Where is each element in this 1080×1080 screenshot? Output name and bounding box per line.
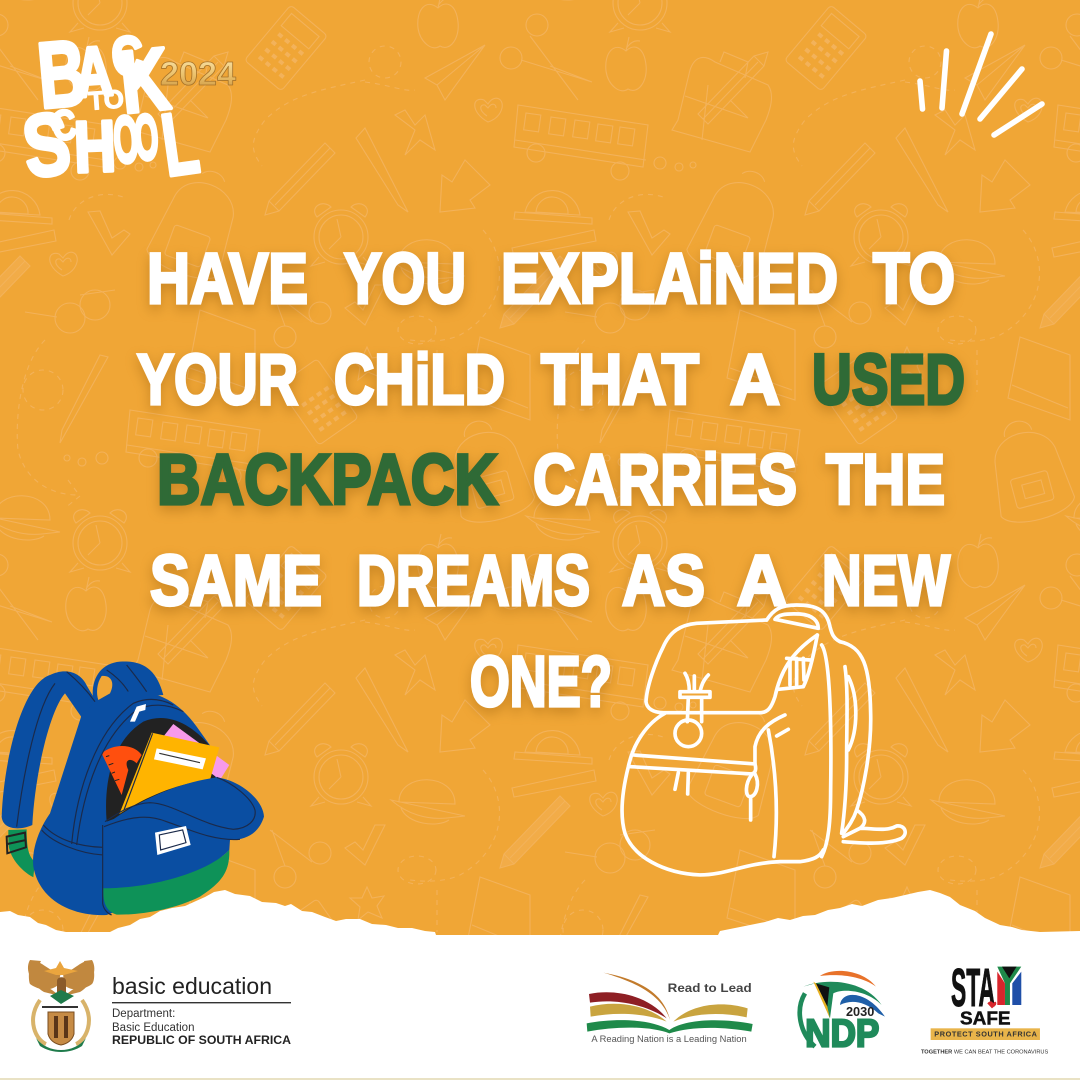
logo: Back to School 2024: C bbox=[49, 102, 79, 151]
logo: Department of Basic Education: REPUBLIC OF SOUTH AFRICA bbox=[112, 1035, 291, 1047]
logo: Read to Lead: A Reading Nation is a Leading Nation bbox=[591, 1034, 747, 1044]
headline: A bbox=[730, 341, 780, 420]
logo: NDP 2030: 2030 bbox=[846, 1005, 874, 1019]
logo: Stay Safe bbox=[921, 959, 1048, 1056]
logo: Back to School 2024: C bbox=[109, 26, 146, 88]
torn white paper footer bbox=[0, 890, 1080, 1080]
logo: Read to Lead bbox=[587, 973, 753, 1044]
logo: Back to School 2024: O bbox=[111, 103, 141, 178]
headline: DREAMS bbox=[357, 542, 590, 621]
icon: blue backpack with books bbox=[2, 661, 264, 915]
headline: ONE? bbox=[470, 643, 612, 722]
logo: NDP 2030: NDP bbox=[805, 1013, 879, 1056]
logo: NDP 2030 bbox=[800, 971, 885, 1056]
headline: CARRiES bbox=[533, 441, 797, 520]
headline: BACKPACK bbox=[157, 441, 498, 520]
headline: TO bbox=[873, 240, 955, 319]
logo: Stay Safe: SAFE bbox=[960, 1008, 1011, 1029]
logo: Back to School 2024 bbox=[17, 21, 237, 197]
icon: outline backpack bbox=[622, 605, 905, 875]
headline: SAME bbox=[150, 542, 322, 621]
headline: EXPLAiNED bbox=[501, 240, 838, 319]
logo: Stay Safe: TOGETHER WE CAN BEAT THE CORONAVIRUS bbox=[921, 1050, 1048, 1056]
icon: coat of arms bbox=[28, 960, 94, 1052]
headline: YOU bbox=[344, 240, 466, 319]
logo: Back to School 2024: K bbox=[116, 28, 174, 132]
logo: Stay Safe: PROTECT SOUTH AFRICA bbox=[934, 1030, 1038, 1039]
logo: Stay Safe: STA bbox=[951, 959, 995, 1018]
headline bbox=[137, 240, 965, 722]
logo: Back to School 2024: L bbox=[156, 92, 204, 195]
headline: THE bbox=[826, 441, 945, 520]
headline: YOUR bbox=[137, 341, 298, 420]
footer bottom line bbox=[0, 1078, 1080, 1080]
logo: Back to School 2024: O bbox=[132, 101, 161, 174]
headline: CHiLD bbox=[334, 341, 505, 420]
2024 gold numerals: 2024 bbox=[160, 55, 237, 92]
logo: Read to Lead: Read to Lead bbox=[668, 981, 752, 995]
logo: Department of Basic Education bbox=[28, 960, 291, 1052]
logo: Back to School 2024: A bbox=[73, 32, 115, 112]
headline: USED bbox=[812, 341, 965, 420]
logo: Back to School 2024: B bbox=[34, 21, 90, 129]
sparkle lines top right bbox=[920, 34, 1042, 135]
headline: THAT bbox=[541, 341, 699, 420]
logo: Back to School 2024: TO bbox=[87, 84, 125, 116]
headline: AS bbox=[622, 542, 705, 621]
wordmark: basic education bbox=[112, 973, 272, 999]
logo: Back to School 2024: S bbox=[17, 93, 76, 197]
headline: NEW bbox=[822, 542, 950, 621]
logo: Back to School 2024: H bbox=[73, 105, 117, 187]
logo: Department of Basic Education: Department: bbox=[112, 1008, 175, 1020]
logo: Department of Basic Education: Basic Education bbox=[112, 1022, 194, 1034]
headline: A bbox=[737, 542, 787, 621]
headline: HAVE bbox=[147, 240, 308, 319]
